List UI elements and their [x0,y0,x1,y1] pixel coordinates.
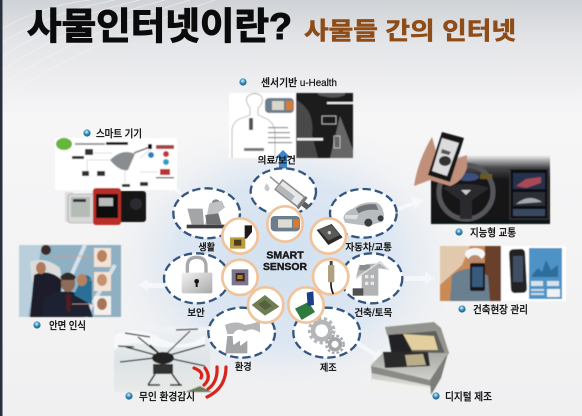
label: smart traffic: 지능형 교통 [470,226,516,239]
domain labels [187,155,392,374]
center label [263,250,307,273]
label: drone monitoring: 무인 환경감시 [139,390,195,403]
label: smart traffic [455,226,516,239]
icon: syringe [264,177,313,213]
icon: person at laptop [187,199,227,228]
smart watches [65,188,146,225]
panel: smart car image [414,132,550,224]
icon: red wireless signal [194,367,226,397]
panel: construction site image [440,246,566,301]
domain labels: 자동차/교통 [345,242,392,254]
label: drone monitoring [125,390,195,403]
wearable sensor device [265,98,294,113]
sensor: wearable module [267,206,303,242]
panel: 3D printer image [371,322,449,395]
icon: blue up arrow [275,150,291,172]
panel: manufacturing [293,308,360,358]
title: 사물인터넷이란? [27,6,292,47]
domain labels: 환경 [235,361,252,373]
smart glasses [110,152,135,170]
domain labels: 건축/토목 [354,308,392,319]
label: digital manufacturing: 디지털 제조 [445,390,492,403]
sensor: green circuit board [248,287,283,323]
icon: factory [225,321,260,353]
label: digital manufacturing [432,390,492,403]
sensor: packaged chip [222,260,258,295]
panel: environment [208,308,275,358]
icon: padlock [182,257,212,293]
steering wheel [439,165,493,219]
panel: sensor health image [229,93,353,158]
icon: car [343,202,384,227]
sensor: wireless module [288,287,324,323]
domain labels: 제조 [320,363,337,374]
domain labels: 보안 [187,307,205,319]
center label: SENSOR [263,262,307,273]
body [371,352,448,395]
label: smart devices: 스마트 기기 [96,128,142,140]
label: face recognition [33,320,86,332]
lid rim [385,322,449,354]
handset [509,249,527,293]
label: health [239,76,337,89]
label: health: 센서기반 u-Health [261,76,337,89]
panel: smart devices image [55,138,177,225]
ultrasound image [296,93,353,158]
panel: drone image [114,327,212,392]
panel: security [164,253,229,303]
sensor: GPS chip [311,218,346,254]
label: face recognition: 안면 인식 [49,320,86,332]
domain labels: 의료/보건 [258,155,296,166]
subtitle: 사물들 간의 인터넷 [304,18,516,45]
connector arrows [138,184,434,360]
smart sensor diagram [164,155,402,374]
icon: gears [309,318,344,353]
label: construction site: 건축현장 관리 [473,304,528,316]
center label: SMART [266,250,304,261]
monitoring screen [529,248,562,299]
drone [118,329,205,366]
touch screen [510,169,548,219]
panel: face recognition image [19,245,121,317]
icon: building [353,262,389,296]
panel: living [173,188,240,238]
sensor: image chip ribbon [222,218,258,254]
sensor: pressure probe [313,259,348,294]
panel: vehicle [330,189,397,238]
panel: medical [251,168,316,215]
panel: construction [341,253,402,303]
body outline [232,94,275,158]
inset faces [94,248,111,315]
lid interior [386,326,449,362]
hand holding phone [414,137,467,186]
domain labels: 생활 [198,242,215,254]
